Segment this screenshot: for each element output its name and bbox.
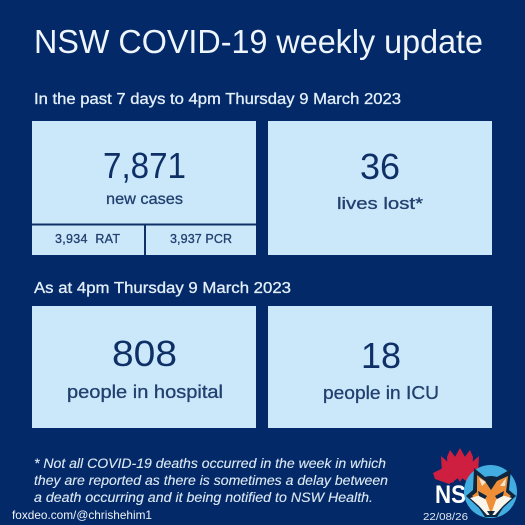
footnote: a death occurring and it being notified to NSW Health. bbox=[34, 490, 373, 505]
ICU label: people in ICU bbox=[323, 383, 439, 403]
new cases label: new cases bbox=[106, 191, 183, 208]
ICU number: 18 bbox=[361, 335, 401, 376]
lives lost label: lives lost* bbox=[337, 194, 423, 213]
panel: lives lost bbox=[268, 121, 492, 255]
icon: NSW waratah logo bbox=[433, 448, 488, 509]
hospital label: people in hospital bbox=[67, 382, 223, 402]
footnote bbox=[34, 456, 388, 505]
PCR count: 3,937 PCR bbox=[170, 232, 232, 246]
icon: NSW waratah logo: NS bbox=[435, 481, 466, 509]
footnote: they are reported as there is sometimes a delay between bbox=[34, 473, 388, 488]
subheading: past 7 days: In the past 7 days to 4pm Thursday 9 March 2023 bbox=[34, 91, 401, 108]
watermark: date: 22/08/26 bbox=[423, 511, 468, 523]
RAT count: 3,934 RAT bbox=[55, 232, 120, 246]
panel: new cases bbox=[32, 121, 256, 255]
subheading: as at: As at 4pm Thursday 9 March 2023 bbox=[34, 280, 291, 297]
watermark: source handle: foxdeo.com/@chrishehim1 bbox=[12, 508, 152, 522]
breakdown dividers bbox=[32, 224, 256, 255]
title: NSW COVID-19 weekly update bbox=[34, 23, 483, 60]
footnote: * Not all COVID-19 deaths occurred in the week in which bbox=[34, 456, 386, 471]
new cases number: 7,871 bbox=[103, 145, 186, 186]
hospital number: 808 bbox=[112, 333, 177, 374]
panel: hospital bbox=[32, 306, 256, 428]
lives lost number: 36 bbox=[360, 146, 400, 187]
panel: ICU bbox=[268, 306, 492, 428]
icon: fox head badge bbox=[464, 465, 517, 518]
